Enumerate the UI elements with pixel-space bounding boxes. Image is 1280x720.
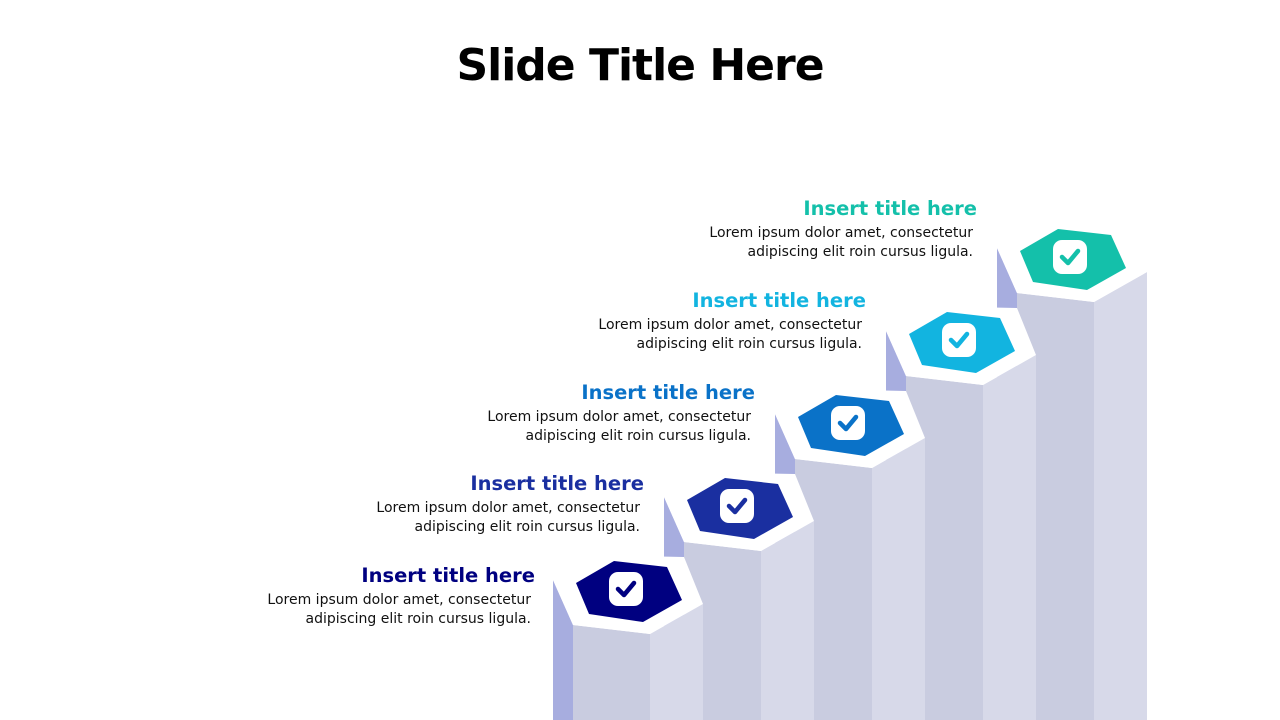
text: step 3: Insert title here — [581, 381, 755, 404]
text: step 1 — [267, 564, 535, 627]
text: step 4: adipiscing elit roin cursus ligula. — [637, 336, 862, 352]
text: step 2 — [376, 472, 644, 535]
text: step 4: Lorem ipsum dolor amet, consectetur — [598, 317, 862, 333]
text: step 3: adipiscing elit roin cursus ligula. — [526, 428, 751, 444]
text: step 1: Lorem ipsum dolor amet, consectetur — [267, 592, 531, 608]
step 1 column — [553, 555, 703, 720]
step 2 column — [664, 472, 814, 720]
staircase chart — [553, 229, 1147, 720]
text: step 5 — [709, 197, 977, 260]
text: step 1: Insert title here — [361, 564, 535, 587]
step 4 column — [886, 306, 1036, 720]
text: step 3 — [487, 381, 755, 444]
text: step 4 — [598, 289, 866, 352]
text: step 5: Lorem ipsum dolor amet, consectetur — [709, 225, 973, 241]
step 3 column — [775, 389, 925, 720]
text: step 2: Insert title here — [470, 472, 644, 495]
title: Slide Title Here — [456, 40, 824, 91]
step 5 column — [997, 223, 1147, 720]
text: step 1: adipiscing elit roin cursus ligula. — [306, 611, 531, 627]
text: step 2: Lorem ipsum dolor amet, consectetur — [376, 500, 640, 516]
text: step 3: Lorem ipsum dolor amet, consectetur — [487, 409, 751, 425]
text: step 5: adipiscing elit roin cursus ligula. — [748, 244, 973, 260]
text: step 5: Insert title here — [803, 197, 977, 220]
text: step 2: adipiscing elit roin cursus ligula. — [415, 519, 640, 535]
text: step 4: Insert title here — [692, 289, 866, 312]
